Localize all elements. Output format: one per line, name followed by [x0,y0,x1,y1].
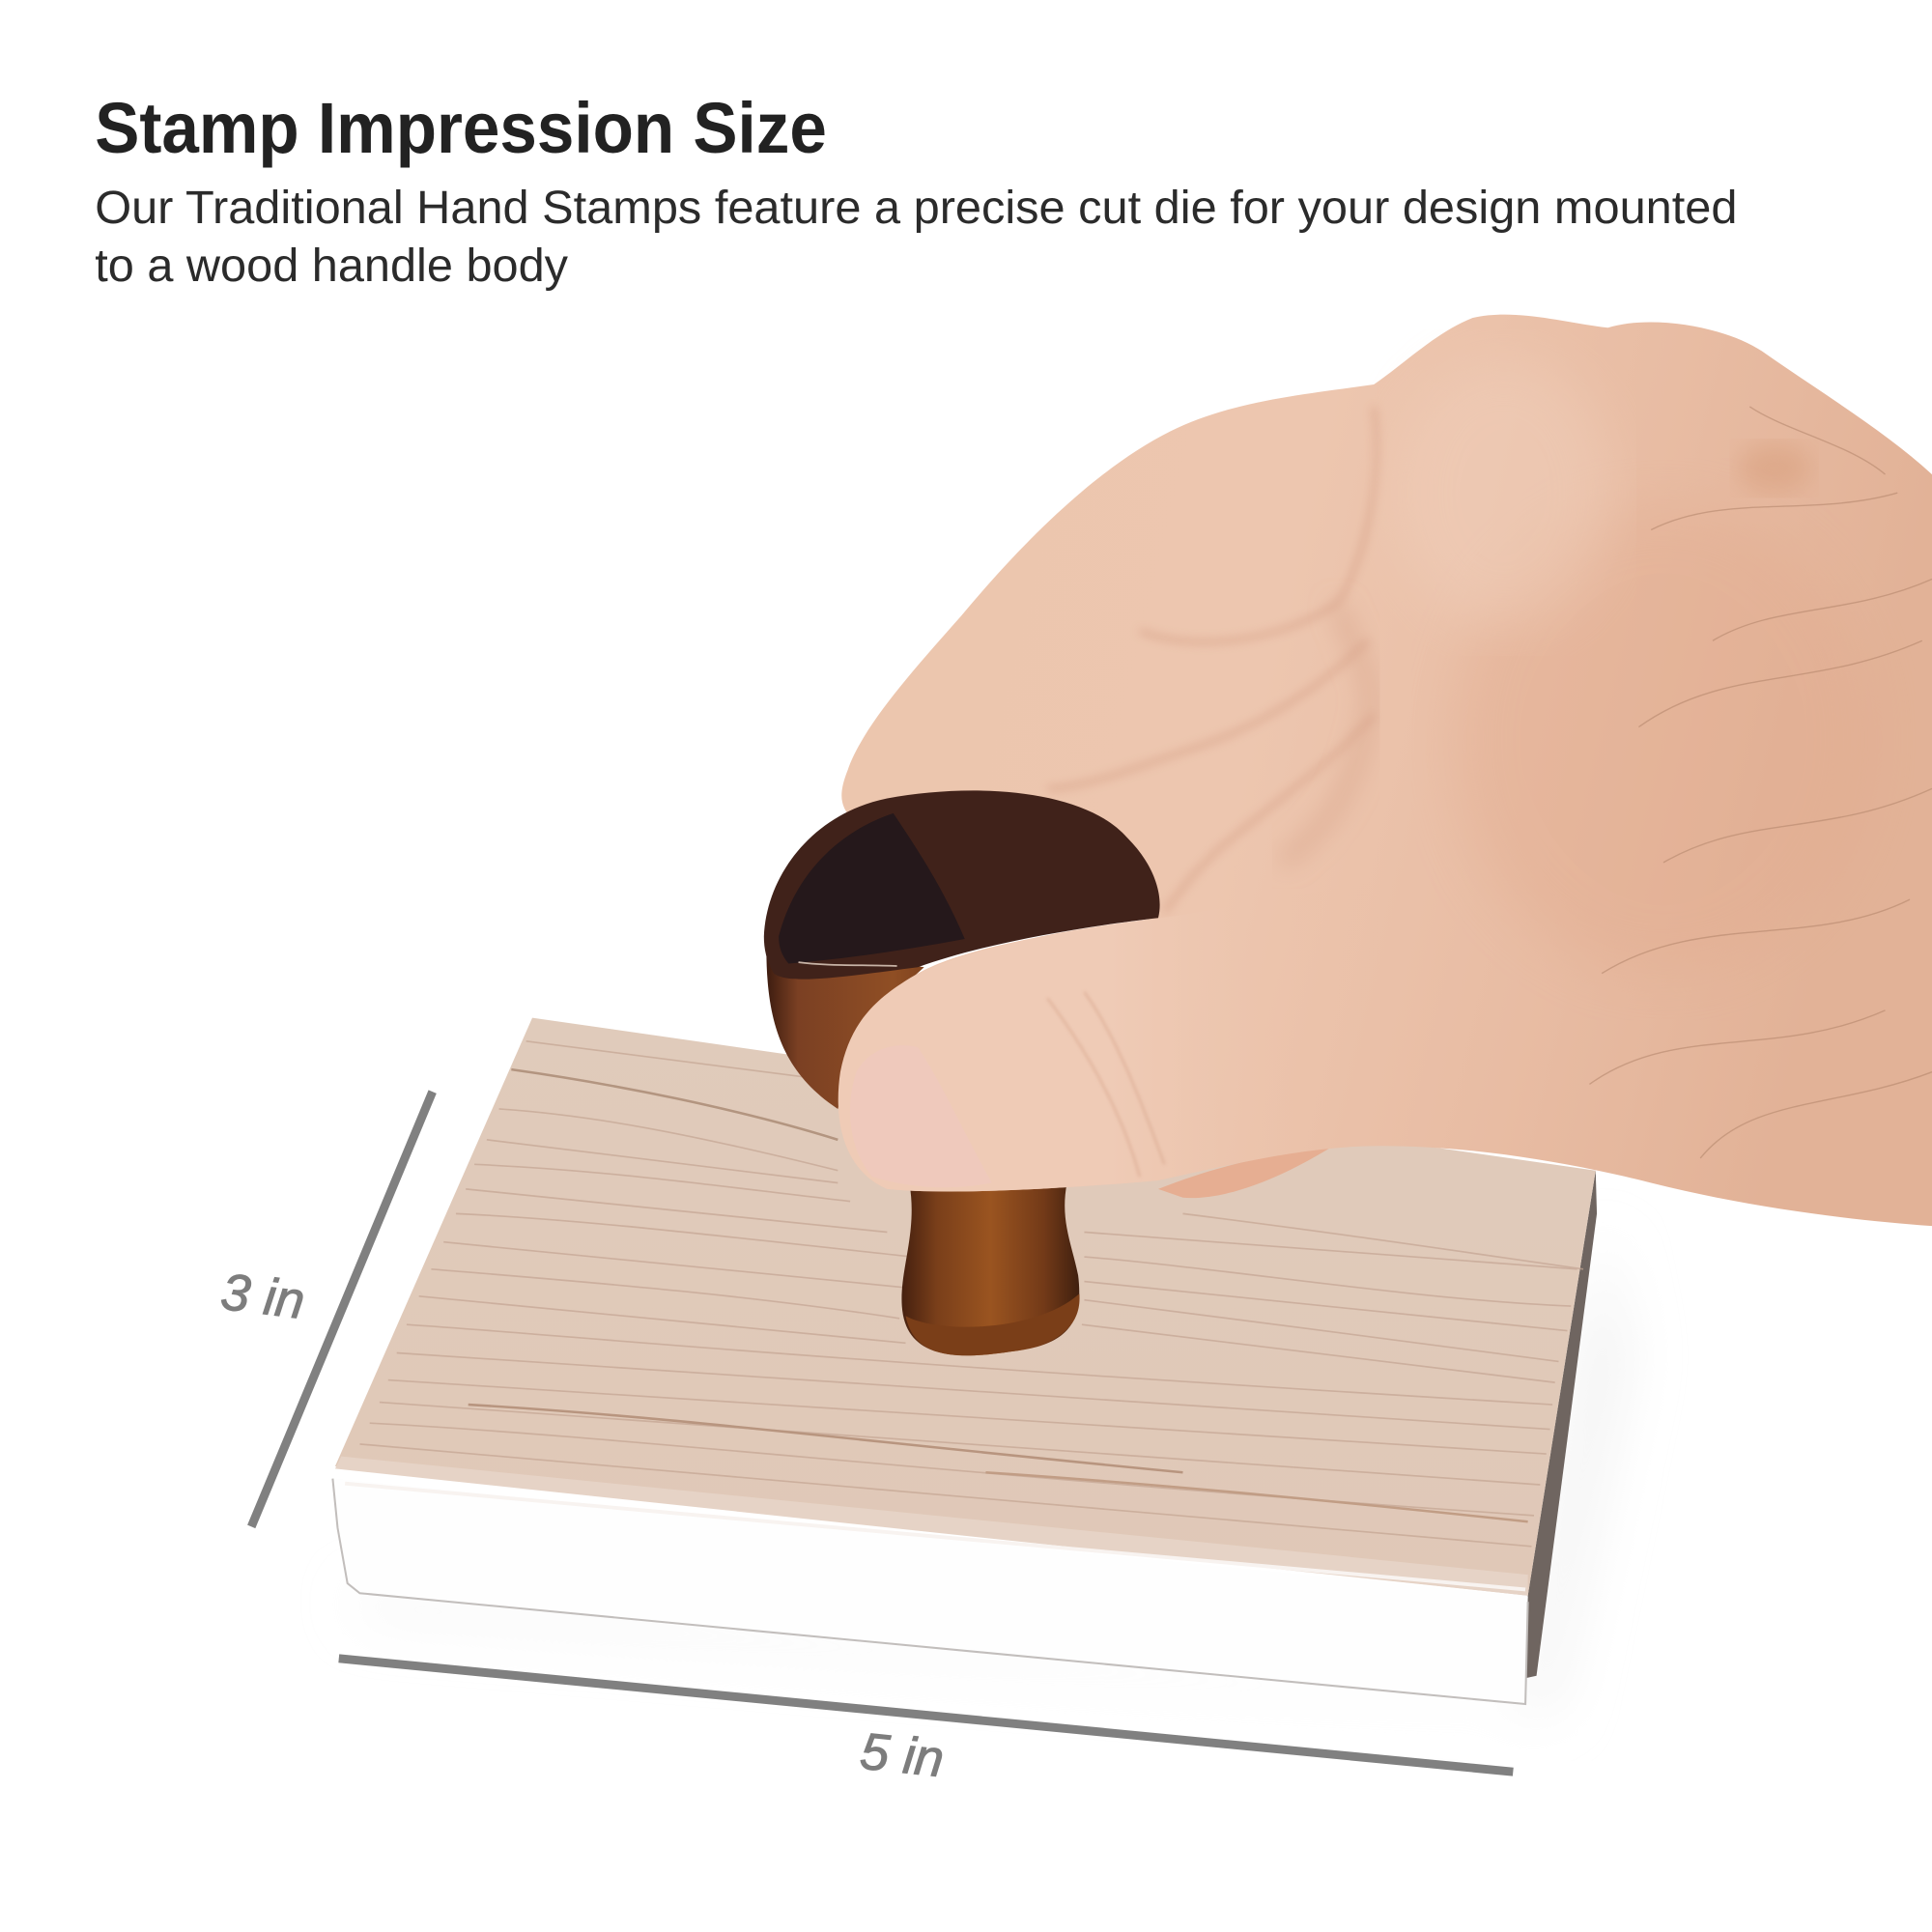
thumb wrinkles [1047,992,1164,1177]
subtitle text: to a wood handle body [95,240,569,292]
stamp handle stem [901,1182,1080,1355]
stamp white base [332,1479,1528,1704]
stamp wood top [335,1018,1596,1596]
dimension: 5 in: 5 in [858,1723,947,1788]
knob side [766,949,924,1109]
subtitle text [95,182,1737,292]
hair [1589,407,1932,1158]
stamp block [332,1018,1597,1704]
stamp shadow [352,1233,1627,1713]
dimension: 3 in: 3 in [218,1264,307,1330]
thumb nail [850,1045,992,1187]
title: Stamp Impression Size [95,88,827,168]
knob glossy dark patch [779,813,965,963]
finger creases [1047,407,1377,912]
knob top [764,790,1160,980]
stamp knob [764,790,1160,1109]
hand [838,315,1932,1226]
wood bevel strip [335,1457,1528,1596]
hand behind fingertip [1158,1146,1333,1198]
knob highlight [799,962,897,966]
skin blotches [1454,505,1873,974]
subtitle text: Our Traditional Hand Stamps feature a precise cut die for your design mounted [95,182,1737,234]
stem base ring [906,1293,1080,1355]
stamp dark side edge [1525,1171,1597,1678]
dimension: 3 in [218,1092,433,1526]
dimension: 5 in [339,1659,1513,1788]
wood grain [359,1041,1583,1547]
thumb over knob [838,881,1380,1191]
